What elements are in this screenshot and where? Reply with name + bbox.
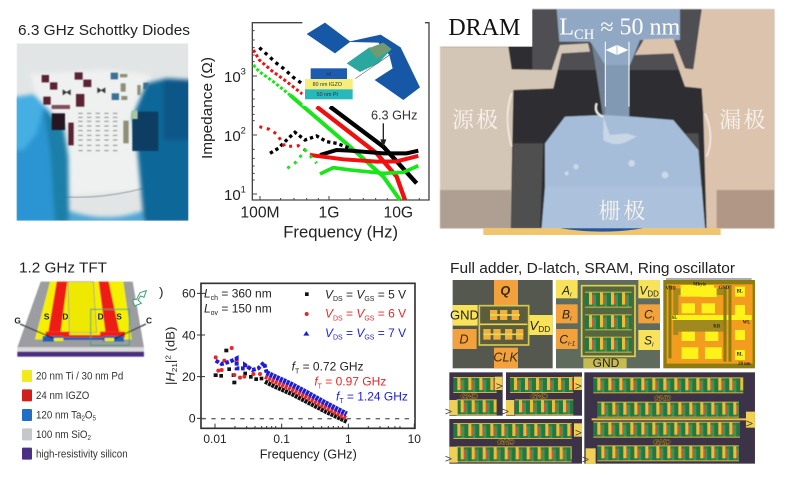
y-axis label: (dB): [164, 327, 178, 355]
legend item: SiO2: 2: [88, 435, 91, 442]
heading: circuits: Full adder, D-latch, SRAM, Ring oscillator: [450, 261, 735, 277]
photo: flexible chip held by gloved fingers: [13, 43, 192, 223]
diagram: TFT layer structure: S: [116, 311, 122, 321]
label: DRAM: [436, 0, 532, 47]
oscillator: large right: [581, 372, 755, 464]
oscillator: large right: V: [581, 456, 591, 462]
oscillator: small left: V: [495, 383, 505, 389]
legend item: SiO2: [22, 428, 91, 442]
panel: full adder micrograph: C: [559, 332, 568, 346]
icon: green arrow: [133, 291, 146, 306]
diagram: TFT layer structure: D: [98, 311, 104, 321]
legend: 5 V: =: [343, 287, 356, 301]
annotation arrow: 6.3 GHz: [371, 108, 417, 147]
legend: [303, 287, 406, 342]
panel: SRAM micrograph: SL: [672, 316, 677, 321]
panel: full adder micrograph: A: [562, 283, 570, 297]
legend: [22, 370, 128, 460]
oscillator: medium bottom: GND: [497, 437, 515, 446]
label: source: 源极: [452, 103, 498, 134]
panel: SRAM micrograph: BL: [737, 353, 743, 358]
base bar: [483, 228, 721, 235]
panel: D-latch micrograph: GND: [450, 307, 479, 322]
annotation: device dimensions: ch: [211, 295, 218, 302]
panel: full adder micrograph: GND: [593, 356, 620, 370]
x tick labels: [203, 432, 421, 446]
legend: 5 V: V: [356, 287, 365, 301]
legend: 5 V: V: [325, 287, 334, 301]
x tick labels: 100M: [240, 204, 280, 221]
annotation: cutoff frequencies: T: [295, 368, 300, 375]
panel: D-latch micrograph: DD: [538, 324, 550, 334]
legend: 7 V: V: [356, 326, 365, 340]
annotation arrow: 6.3 GHz: 6.3 GHz: [371, 108, 417, 122]
legend: 6 V: V: [325, 307, 334, 321]
annotation: cutoff frequencies: f: [314, 375, 319, 389]
oscillator: medium bottom: V: [573, 430, 583, 436]
stray bracket: ): [159, 285, 163, 300]
label: channel length: L: [559, 14, 574, 40]
x tick labels: 0.01: [203, 432, 227, 446]
y tick labels: 0: [189, 412, 196, 426]
panel: full adder micrograph: V: [639, 283, 648, 297]
panel: full adder micrograph: DD: [647, 289, 659, 298]
panel: full adder micrograph: [556, 280, 660, 370]
printed devices: [42, 72, 149, 151]
y-axis label: 2: [164, 355, 173, 360]
diagram: TFT layer structure: D: [62, 311, 68, 321]
x-axis label: Frequency (Hz): [283, 223, 398, 242]
legend item: Ta2O5: 120 nm Ta: [36, 410, 87, 422]
legend: 5 V: DS: [333, 296, 343, 303]
heading: 1.2 GHz TFT: 1.2 GHz TFT: [19, 260, 107, 276]
panel: SRAM micrograph: 20 nm: [738, 362, 751, 367]
series: 7 V: [216, 358, 347, 414]
label: channel length: CH: [574, 27, 595, 43]
oscillator: medium bottom: V: [443, 456, 453, 462]
y tick labels: 20: [182, 370, 196, 384]
x tick labels: 1G: [319, 204, 339, 221]
inset: device structure: Al: [326, 71, 331, 77]
y-axis label: Impedance (Ω): [199, 57, 216, 159]
y tick labels: 10: [224, 69, 241, 86]
panel: full adder micrograph: i-1: [568, 340, 576, 347]
annotation: device dimensions: L: [204, 301, 211, 315]
y-axis label: |: [164, 360, 178, 363]
plot area: [224, 23, 429, 242]
y tick labels: [224, 67, 246, 204]
legend: 7 V: =: [343, 326, 356, 340]
legend item: Ta2O5: O: [85, 410, 93, 422]
annotation: cutoff frequencies: [292, 360, 408, 405]
legend: 6 V: = 6 V: [374, 307, 406, 321]
panel: full adder micrograph: C: [644, 307, 653, 321]
y tick labels: [182, 287, 196, 426]
legend: 6 V: =: [343, 307, 356, 321]
panel: D-latch micrograph: Q: [500, 284, 510, 298]
legend: 6 V: DS: [333, 315, 343, 322]
heading: 6.3 GHz Schottky Diodes: 6.3 GHz Schottky Diodes: [18, 22, 190, 39]
legend item: silicon: high-resistivity silicon: [36, 448, 128, 460]
x tick labels: [240, 204, 413, 221]
legend item: SiO2: 100 nm SiO: [36, 429, 94, 441]
panel: D-latch micrograph: V: [529, 318, 539, 333]
label: drain: 漏极: [719, 103, 765, 134]
annotation: device dimensions: L: [204, 286, 211, 300]
annotation: device dimensions: ov: [211, 310, 219, 317]
annotation: cutoff frequencies: T: [339, 398, 344, 405]
y tick labels: 3: [241, 67, 246, 77]
annotation: cutoff frequencies: = 0.72 GHz: [299, 360, 364, 374]
legend: 7 V: DS: [333, 335, 343, 342]
inset: device structure: [303, 23, 420, 106]
legend: 5 V: = 5 V: [374, 287, 406, 301]
legend: 7 V: = 7 V: [374, 326, 406, 340]
label: channel length: ≈ 50 nm: [594, 14, 680, 40]
series: 6 V: [214, 346, 347, 418]
oscillator: small right: V: [573, 383, 583, 389]
annotation: cutoff frequencies: f: [336, 389, 341, 403]
oscillator: large right: V: [745, 420, 755, 426]
legend: 7 V: GS: [364, 335, 375, 342]
panel: SRAM micrograph: [663, 279, 755, 368]
panel: D-latch micrograph: [450, 280, 553, 368]
legend item: IGZO: 24 nm IGZO: [36, 390, 90, 402]
oscillator: small left: V: [443, 408, 453, 414]
panel: ring oscillators: [443, 372, 755, 464]
oscillator: small left: GND: [461, 391, 478, 400]
diagram: TFT layer structure: [14, 282, 163, 460]
panel: full adder micrograph: i: [653, 315, 655, 322]
panel: SRAM micrograph: GND: [719, 286, 730, 291]
channel length marker: [605, 42, 629, 107]
legend item: metal: 20 nm Ti / 30 nm Pd: [36, 370, 123, 382]
panel: full adder micrograph: i: [652, 341, 654, 348]
x tick labels: 10G: [384, 204, 413, 221]
panel: D-latch micrograph: D: [459, 332, 469, 346]
upper impedance curves: [253, 48, 417, 200]
panel: D-latch micrograph: CLK: [493, 351, 519, 365]
legend: 6 V: GS: [364, 315, 375, 322]
diagram: TFT layer structure: G: [14, 315, 21, 325]
annotation: device dimensions: [204, 286, 272, 317]
legend: 7 V: [303, 326, 406, 342]
annotation: cutoff frequencies: = 1.24 GHz: [344, 389, 408, 403]
x tick labels: 0.1: [273, 432, 290, 446]
legend: 6 V: [305, 307, 406, 322]
label: gate: 栅极: [599, 195, 645, 226]
lower impedance curves: [259, 127, 418, 174]
oscillator: large right: GND: [653, 437, 671, 446]
legend item: Ta2O5: [22, 409, 96, 423]
y-axis label: 21: [170, 363, 179, 372]
y tick labels: 10: [224, 128, 241, 145]
oscillator: large right: GND: [654, 393, 671, 402]
x tick labels: 10: [408, 432, 421, 446]
diagram: TFT layer structure: S: [44, 311, 50, 321]
y tick labels: 1: [241, 185, 246, 195]
panel: SRAM micrograph: KR: [713, 325, 721, 330]
y tick labels: 2: [241, 126, 246, 136]
legend item: Ta2O5: 2: [81, 416, 85, 423]
y tick labels: 40: [182, 328, 196, 342]
annotation: cutoff frequencies: T: [318, 383, 323, 390]
legend item: Ta2O5: 5: [93, 416, 96, 423]
oscillator: small left: [443, 372, 505, 416]
legend: 5 V: [305, 287, 406, 303]
panel: full adder micrograph: B: [562, 307, 570, 321]
series: 5 V: [214, 349, 347, 422]
legend: 6 V: V: [356, 307, 365, 321]
inset: device structure: 80 nm IGZO: [313, 82, 342, 88]
panel: full adder micrograph: S: [644, 333, 652, 347]
oscillator: medium bottom: [443, 419, 583, 464]
chart: impedance versus frequency: [199, 23, 429, 242]
annotation: cutoff frequencies: = 0.97 GHz: [322, 375, 386, 389]
diagram: TFT layer structure: C: [146, 315, 152, 325]
oscillator: small right: V: [501, 408, 511, 414]
y-axis label: |H: [164, 373, 178, 385]
inset: device structure: 50 nm Pt: [317, 92, 338, 98]
oscillator: small right: [501, 372, 583, 416]
panel: SRAM micrograph: Mbyte: [693, 283, 706, 288]
y tick labels: 10: [224, 187, 241, 204]
panel: full adder micrograph: i: [570, 315, 572, 322]
label: DRAM: DRAM: [448, 15, 520, 41]
x-axis label: Frequency (GHz): [260, 447, 357, 461]
oscillator: small right: GND: [531, 391, 548, 400]
photo: false-colour DRAM transistor micrograph: [436, 0, 774, 235]
y tick labels: 60: [182, 287, 196, 301]
x tick labels: 1: [345, 432, 352, 446]
legend: 5 V: GS: [364, 296, 375, 303]
chart: current gain versus frequency: [164, 283, 421, 461]
annotation: device dimensions: = 150 nm: [218, 301, 272, 315]
panel: SRAM micrograph: BL: [737, 289, 743, 294]
annotation: cutoff frequencies: f: [292, 360, 297, 374]
panel: SRAM micrograph: WL: [743, 320, 750, 325]
legend: 7 V: V: [325, 326, 334, 340]
annotation: device dimensions: = 360 nm: [218, 286, 272, 300]
panel: SRAM micrograph: VDD: [666, 286, 676, 291]
panel: full adder micrograph: i: [570, 291, 572, 298]
